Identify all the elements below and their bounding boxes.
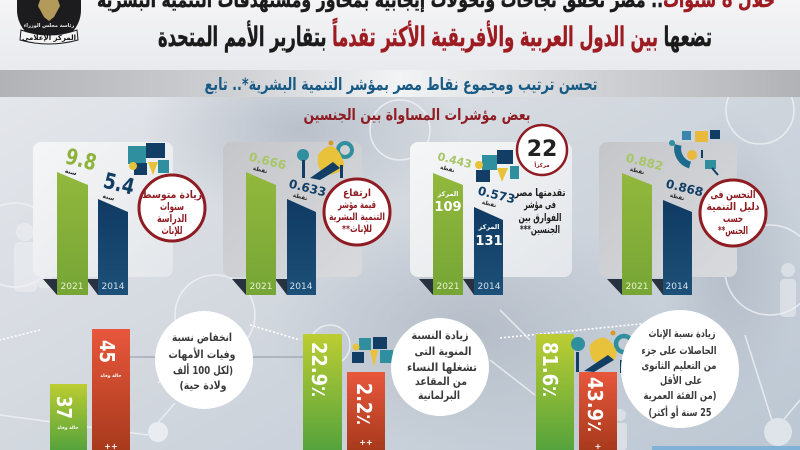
callout: التنمية البشرية <box>329 212 385 223</box>
bar 2021 <box>246 172 276 295</box>
callout: ارتفاع <box>343 188 371 199</box>
icon: puzzle <box>352 337 393 367</box>
callout: حسب <box>723 213 743 225</box>
bar shadows <box>419 279 474 295</box>
value 9.8: 9.8 <box>63 145 99 176</box>
bar 2021 <box>433 173 463 295</box>
badge: 22 ranks <box>517 125 567 175</box>
panel: years of schooling: 2014 <box>102 282 125 292</box>
value 0.666: نقطة <box>252 166 268 175</box>
callout: دليل التنمية <box>706 201 760 213</box>
callout circle: زيادة نسبة الإناث <box>648 328 716 340</box>
logo <box>17 0 81 44</box>
panel: female HDI: 2014 <box>290 282 313 292</box>
callout text <box>514 187 566 236</box>
value 0.443: 0.443 <box>436 150 473 171</box>
panel: gender gap index: المركز <box>437 190 458 198</box>
value 0.882: نقطة <box>629 167 645 176</box>
chart: women in parliament: 2.2٪ <box>352 383 376 425</box>
callout circle: على الأقل <box>660 374 702 387</box>
callout circle: تشغلها النساء <box>407 361 477 374</box>
callout circle: من المقاعد <box>415 375 467 388</box>
value 0.868: 0.868 <box>664 177 705 199</box>
callout: الدراسة <box>157 213 187 225</box>
section heading: بعض مؤشرات المساواة بين الجنسين <box>304 106 530 124</box>
panel: years of schooling: 2021 <box>61 282 83 292</box>
chart: secondary education: 43.9٪ <box>583 377 607 432</box>
panel: gender gap index: 109 <box>434 200 462 215</box>
value 0.882: 0.882 <box>624 151 665 173</box>
bar red 43.9 <box>579 372 617 450</box>
bar red 2.2 <box>347 372 385 450</box>
footer box <box>652 446 800 450</box>
panel: female HDI: 2021 <box>250 282 272 292</box>
chart: secondary education: 81.6٪ <box>538 342 562 397</box>
badge: 22 ranks: مركزاً <box>534 161 550 169</box>
callout <box>700 180 766 246</box>
value 0.868: نقطة <box>669 193 685 202</box>
chart: maternal mortality: حالة وفاة <box>100 374 122 379</box>
bar green 37 <box>50 384 87 450</box>
bar red 45 <box>92 329 130 450</box>
panel: gender development index <box>599 130 766 295</box>
logo: المركز الإعلامي <box>22 34 76 42</box>
bar 2014 <box>663 200 692 295</box>
bar green 81.6 <box>536 334 574 450</box>
panel: years of schooling <box>33 142 205 295</box>
callout circle: المنوية التى <box>414 345 472 358</box>
panel: gender gap index <box>410 125 572 295</box>
callout circle <box>391 318 489 416</box>
callout text: تقدمتها مصر <box>514 187 566 199</box>
callout circle: (من الفئة العمرية <box>644 390 716 402</box>
icon: person with gear <box>297 140 352 180</box>
callout: الجنس** <box>718 225 748 237</box>
callout circle: الحاصلات على جزء <box>642 345 716 357</box>
value 0.633: 0.633 <box>287 177 328 199</box>
callout circle <box>621 310 739 428</box>
callout: التحسن فى <box>710 189 756 201</box>
chart: women in parliament <box>303 318 489 450</box>
header <box>0 0 800 70</box>
chart: women in parliament: ++ <box>359 438 373 447</box>
callout text: الفوارق بين <box>518 212 562 224</box>
value 0.633: نقطة <box>292 193 308 202</box>
value 0.443: نقطة <box>439 165 455 174</box>
callout circle: 25 سنة أو أكثر) <box>648 405 712 419</box>
subtitle band: تحسن ترتيب ومجموع نقاط مصر بمؤشر التنمية البشرية*.. تابع <box>204 75 598 95</box>
subtitle band <box>0 70 800 97</box>
bar 2021 <box>57 172 88 295</box>
icon: puzzle <box>128 143 169 175</box>
icon: puzzle <box>475 150 519 182</box>
icon: person with gear <box>571 330 632 373</box>
callout circle: وفيات الأمهات <box>168 347 236 361</box>
chart: secondary education <box>536 310 739 450</box>
logo: رئاسة مجلس الوزراء <box>24 23 74 29</box>
chart: maternal mortality: 37 <box>52 396 76 419</box>
bar 2021 <box>622 173 652 295</box>
panel: gender gap index: 2021 <box>437 282 459 292</box>
bar green 22.9 <box>303 334 342 450</box>
badge: 22 ranks: 22 <box>527 137 557 162</box>
panel: gender development index: 2021 <box>626 282 648 292</box>
bar 2014 <box>474 207 503 295</box>
callout circle: (لكل 100 ألف <box>173 363 233 377</box>
callout circle: انخفاض نسبة <box>172 331 232 344</box>
panel: gender gap index: 2014 <box>478 282 501 292</box>
panel: gender development index: 2014 <box>666 282 689 292</box>
chart: maternal mortality: 45 <box>95 340 119 363</box>
chart: maternal mortality: حالة وفاة <box>57 426 79 431</box>
callout: زيادة متوسط <box>142 189 202 201</box>
icon: analytics group <box>669 130 720 175</box>
value 0.573: نقطة <box>481 200 497 209</box>
callout circle: زيادة النسبة <box>412 329 468 342</box>
callout circle: ولادة حية) <box>180 379 227 392</box>
bar 2014 <box>98 199 128 295</box>
chart: maternal mortality <box>50 311 253 450</box>
callout: قيمة مؤشر <box>337 200 376 211</box>
panel: gender gap index: 131 <box>475 234 503 249</box>
callout text: فى مؤشر <box>523 199 556 211</box>
panel: female HDI <box>223 140 390 295</box>
value 0.666: 0.666 <box>247 150 288 172</box>
bar shadows <box>43 279 98 295</box>
value 5.4: 5.4 <box>101 169 137 201</box>
callout text: الجنسين*** <box>520 224 560 236</box>
callout circle <box>155 311 253 409</box>
callout: للإناث <box>162 225 183 237</box>
callout: للإناث** <box>342 224 372 235</box>
title <box>97 0 775 53</box>
value 5.4: سنة <box>102 193 115 202</box>
value 9.8: سنة <box>64 168 77 177</box>
callout <box>324 179 390 245</box>
callout circle: البرلمانية <box>418 389 460 402</box>
callout: سنوات <box>160 201 184 213</box>
panel: gender gap index: المركز <box>478 223 499 231</box>
callout circle: من التعليم الثانوى <box>642 360 716 372</box>
callout <box>139 175 205 241</box>
value 0.573: 0.573 <box>476 184 517 206</box>
bar shadows <box>607 279 663 295</box>
bar shadows <box>232 279 287 295</box>
bar 2014 <box>287 199 316 295</box>
chart: women in parliament: 22.9٪ <box>307 342 331 397</box>
